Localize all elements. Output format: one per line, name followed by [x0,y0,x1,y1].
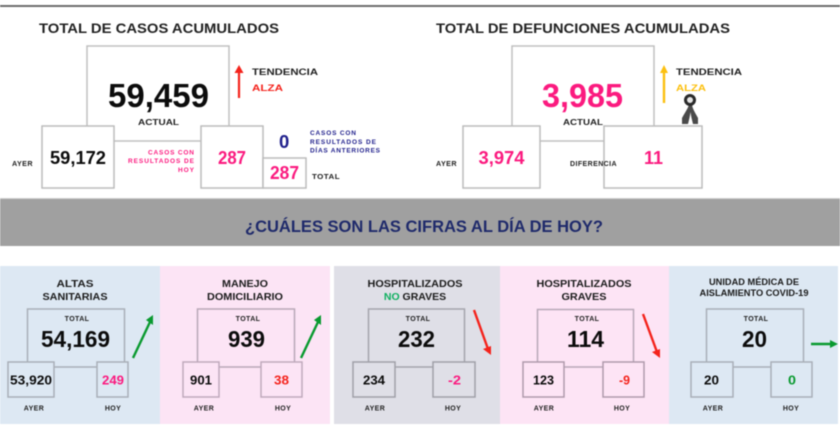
ayer number: 123 [533,374,554,388]
ayer and hoy labels: HOY [105,406,121,412]
hoy number: -2 [448,374,461,388]
dias anteriores number: 0 [279,131,289,152]
total label: TOTAL [65,316,90,323]
total number: 287 [270,162,299,183]
total label: TOTAL [744,316,769,323]
alza label: ALZA [676,83,706,94]
casos con resultados de hoy label: CASOS CON [148,150,194,156]
total number: 939 [228,326,265,352]
panel title [42,278,108,303]
boxes [691,309,812,397]
panel title [368,278,462,303]
ayer and hoy labels: HOY [783,406,799,412]
panel: manejo domiciliario [160,266,330,424]
heading: defunciones: TOTAL DE DEFUNCIONES ACUMULADAS [436,20,730,36]
total label: TOTAL [236,316,261,323]
panel: altas sanitarias [0,266,160,424]
casos con resultados de hoy label: HOY [178,167,195,174]
tendencia label: TENDENCIA [252,67,318,78]
panel title: DOMICILIARIO [207,291,283,303]
arrow: green up [301,315,321,358]
tendencia label: TENDENCIA [676,67,742,78]
casos con resultados de hoy label [128,150,195,174]
ayer and hoy labels: AYER [534,406,554,412]
hoy number: -9 [619,374,630,388]
ayer and hoy labels: AYER [194,406,214,412]
ayer number: 53,920 [10,374,52,388]
ayer and hoy labels [703,406,799,412]
panel: hospitalizados no graves [334,266,500,424]
panel title [536,278,632,303]
panel title: ALTAS [56,278,94,290]
icon: mourning ribbon [682,96,698,124]
ayer number: 234 [363,374,385,388]
arrow: red down [474,310,491,355]
arrow: green right [811,340,838,348]
panel: unidad medica de aislamiento [669,266,838,424]
banner [0,199,840,246]
panel title [700,277,808,298]
connector lines and boxes: defunciones [463,46,702,188]
arrow: red down [643,314,660,358]
panel: total de casos acumulados [12,20,381,188]
arrow: green up [133,315,153,358]
connector lines and boxes: casos [42,46,306,188]
arrow: trend up red [234,65,244,98]
ayer and hoy labels [194,406,291,412]
ayer label: AYER [12,161,33,168]
ayer and hoy labels [24,406,121,412]
panel title [207,278,283,303]
casos con resultados de hoy label: RESULTADOS DE [128,158,195,165]
ayer and hoy labels [534,406,630,412]
boxes [8,309,128,397]
ayer label: AYER [436,161,457,168]
diferencia label: DIFERENCIA [570,161,617,168]
panel title: UNIDAD MÉDICA DE [709,277,799,287]
ayer number: 3,974 [478,147,525,168]
panel title: HOSPITALIZADOS [368,278,462,290]
hoy number: 0 [788,374,796,388]
panel title: GRAVES [562,291,606,303]
dias anteriores label: CASOS CON [310,130,356,137]
hoy number: 38 [274,374,289,388]
ayer number: 59,172 [50,147,106,168]
ayer and hoy labels: AYER [703,406,723,412]
dias anteriores label: RESULTADOS DE [310,139,377,146]
panel title: MANEJO [222,278,268,290]
ayer and hoy labels: AYER [365,406,385,412]
panel title: SANITARIAS [42,291,108,303]
ayer number: 20 [704,374,719,388]
hoy number: 287 [218,147,246,168]
total label: TOTAL [312,174,340,181]
panel: hospitalizados graves [500,266,669,424]
ayer number: 901 [190,374,212,388]
actual label: ACTUAL [138,118,179,127]
total number: 232 [398,326,435,352]
heading: casos: TOTAL DE CASOS ACUMULADOS [39,20,279,36]
panel title: HOSPITALIZADOS [536,278,632,290]
actual deaths number: 3,985 [542,77,623,114]
actual cases number: 59,459 [108,77,209,114]
ayer and hoy labels: HOY [614,406,630,412]
banner heading: ¿CUÁLES SON LAS CIFRAS AL DÍA DE HOY? [245,217,603,236]
ayer and hoy labels: HOY [275,406,291,412]
total number: 54,169 [41,326,110,352]
total number: 114 [567,326,604,352]
dias anteriores label: DÍAS ANTERIORES [310,146,381,154]
panel: total de defunciones acumuladas [436,20,742,188]
arrow: trend up yellow [660,65,668,103]
ayer and hoy labels: AYER [24,406,44,412]
total label: TOTAL [406,316,431,323]
hoy number: 249 [102,374,124,388]
total label: TOTAL [575,316,600,323]
alza label: ALZA [252,83,283,94]
ayer and hoy labels [365,406,461,412]
boxes [183,309,302,397]
total number: 20 [742,326,767,352]
panel title: NO GRAVES [384,291,446,303]
dias anteriores label [310,130,381,154]
boxes [353,309,475,397]
boxes [523,310,644,397]
panel title: AISLAMIENTO COVID-19 [700,288,808,298]
diferencia number: 11 [644,147,663,168]
ayer and hoy labels: HOY [445,406,461,412]
actual label: ACTUAL [563,118,603,127]
